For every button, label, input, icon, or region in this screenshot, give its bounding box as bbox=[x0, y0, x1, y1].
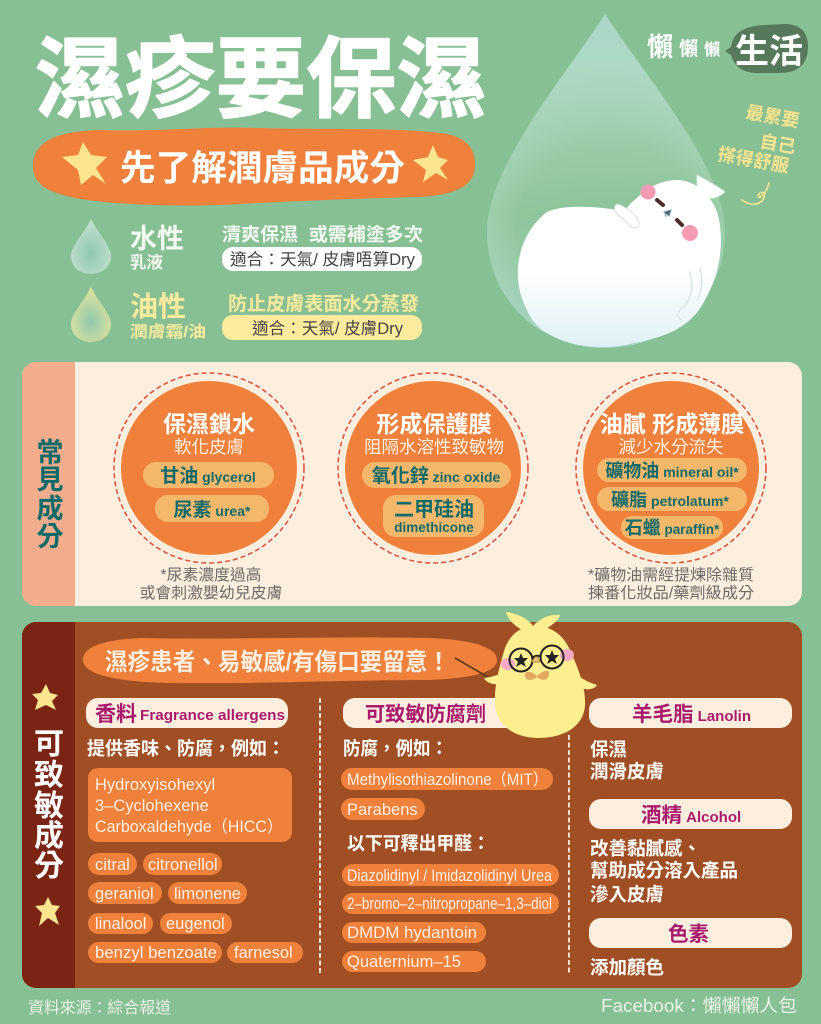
vertical heading bbox=[36, 438, 64, 552]
circle: greasy thin film: 油膩 形成薄膜 bbox=[600, 411, 744, 437]
note: mineral oil: 揀番化妝品/藥劑級成分 bbox=[588, 584, 755, 602]
oil type description: 防止皮膚表面水分蒸發 bbox=[228, 292, 419, 315]
handwritten note bbox=[716, 102, 801, 204]
column: fragrance: benzyl benzoate bbox=[95, 944, 217, 962]
column: lanolin, alcohol, colourant: 改善黏膩感、 bbox=[590, 838, 701, 859]
column dividers bbox=[319, 698, 321, 973]
column: fragrance: 3–Cyclohexene bbox=[95, 797, 209, 815]
water type label bbox=[130, 224, 184, 272]
logo speech bubble bbox=[725, 24, 808, 73]
circle: protective film: 二甲硅油 bbox=[394, 498, 474, 521]
column: preservatives bbox=[341, 698, 559, 972]
pointer stick bbox=[455, 658, 493, 680]
seal tail lines bbox=[678, 268, 702, 320]
note: mineral oil bbox=[588, 565, 755, 602]
vertical heading: 分 bbox=[36, 522, 64, 552]
column: lanolin, alcohol, colourant: 幫助成分溶入產品 bbox=[590, 860, 738, 881]
callout banner bbox=[83, 637, 497, 683]
title: 濕疹要保濕 bbox=[35, 30, 487, 129]
panel: allergenic ingredients bbox=[22, 612, 802, 988]
column: lanolin, alcohol, colourant: 羊毛脂 Lanolin bbox=[632, 703, 751, 726]
glasses bbox=[510, 646, 564, 672]
column: lanolin, alcohol, colourant: 潤滑皮膚 bbox=[590, 761, 664, 782]
water type description: 適合：天氣/ 皮膚唔算Dry bbox=[230, 250, 416, 269]
bow tie bbox=[525, 671, 549, 680]
circle: moisture lock: 軟化皮膚 bbox=[174, 437, 244, 457]
water type label: 水性 bbox=[130, 224, 184, 254]
column: fragrance: citronellol bbox=[148, 856, 218, 874]
column: lanolin, alcohol, colourant: 保濕 bbox=[590, 739, 627, 760]
footer: source: 資料來源：綜合報道 bbox=[28, 999, 171, 1017]
circle: greasy thin film bbox=[576, 373, 766, 563]
cheeks bbox=[501, 658, 515, 670]
vertical heading: 致 bbox=[34, 759, 64, 792]
icon: star top bbox=[32, 684, 58, 710]
illustration: big water drop with seal bbox=[487, 14, 725, 348]
handwritten note: 自己 bbox=[758, 131, 797, 157]
vertical heading: 見 bbox=[36, 465, 64, 495]
body bbox=[495, 626, 585, 738]
oil type description: 適合：天氣/ 皮膚Dry bbox=[252, 319, 404, 338]
vertical heading: 成 bbox=[36, 494, 64, 524]
column: preservatives: Parabens bbox=[347, 801, 418, 819]
vertical heading: 敏 bbox=[34, 790, 64, 823]
handwritten note: 搽得舒服 bbox=[716, 143, 791, 176]
subtitle text: 先了解潤膚品成分 bbox=[120, 148, 405, 188]
vertical heading: 成 bbox=[34, 820, 64, 853]
column: fragrance: Fragrance allergens bbox=[140, 707, 285, 724]
icon: star bottom bbox=[35, 897, 60, 926]
arms bbox=[484, 668, 597, 689]
oil type label: 潤膚霜/油 bbox=[130, 323, 206, 341]
column: preservatives: Quaternium–15 bbox=[347, 953, 461, 971]
note: urea: 或會刺激嬰幼兒皮膚 bbox=[140, 584, 282, 602]
column: fragrance: farnesol bbox=[234, 944, 293, 962]
water type description bbox=[222, 224, 424, 271]
logo bbox=[647, 24, 808, 73]
water type description: 清爽保濕 或需補塗多次 bbox=[222, 224, 424, 245]
star eyes bbox=[514, 653, 528, 667]
column: preservatives: 防腐，例如： bbox=[343, 738, 448, 759]
circle: greasy thin film: 礦物油 mineral oil* bbox=[605, 460, 739, 481]
column: preservatives: 可致敏防腐劑 bbox=[365, 702, 486, 726]
logo: 生活 bbox=[735, 33, 803, 71]
bow bbox=[506, 612, 560, 632]
icon: right star bbox=[413, 145, 448, 182]
seal body bbox=[518, 180, 721, 347]
seal cheeks bbox=[640, 184, 656, 200]
column: fragrance: linalool bbox=[95, 915, 146, 933]
seal arm bbox=[615, 204, 639, 228]
oil type description bbox=[222, 292, 422, 340]
circle: moisture lock: 甘油 glycerol bbox=[160, 465, 256, 487]
column: fragrance: Hydroxyisohexyl bbox=[95, 776, 215, 794]
oil type label: 油性 bbox=[130, 291, 186, 322]
icon: water drop, water type bbox=[71, 219, 111, 274]
circle: protective film: dimethicone bbox=[394, 520, 474, 535]
circle: protective film: 氧化鋅 zinc oxide bbox=[372, 464, 501, 487]
illustration: yellow chick with pointer bbox=[455, 612, 597, 738]
icon: left star bbox=[62, 142, 107, 185]
column: lanolin, alcohol, colourant bbox=[589, 698, 792, 978]
seal hat bbox=[697, 175, 725, 198]
circle: greasy thin film: 礦脂 petrolatum* bbox=[611, 489, 729, 510]
column: lanolin, alcohol, colourant: 滲入皮膚 bbox=[590, 884, 664, 905]
column: fragrance: limonene bbox=[174, 885, 241, 903]
note: urea bbox=[140, 566, 282, 602]
oil type label bbox=[130, 291, 206, 341]
callout banner: 濕疹患者、易敏感/有傷口要留意！ bbox=[105, 648, 450, 676]
column: fragrance: 提供香味、防腐，例如： bbox=[87, 738, 285, 759]
column: preservatives: 2–bromo–2–nitropropane–1,3–diol bbox=[347, 895, 552, 913]
circle: protective film: 形成保護膜 bbox=[376, 411, 492, 437]
circle: moisture lock: 尿素 urea* bbox=[174, 499, 251, 521]
column: fragrance: 香料 bbox=[95, 703, 137, 726]
column: lanolin, alcohol, colourant: 添加顏色 bbox=[590, 957, 664, 978]
column: fragrance: citral bbox=[95, 856, 130, 874]
logo: 懶 bbox=[704, 41, 720, 59]
column: lanolin, alcohol, colourant: 色素 bbox=[668, 923, 709, 946]
vertical heading bbox=[34, 728, 64, 883]
circle: protective film: 阻隔水溶性致敏物 bbox=[364, 437, 504, 457]
column: fragrance: geraniol bbox=[95, 885, 154, 903]
circle: greasy thin film: 石蠟 paraffin* bbox=[625, 518, 720, 538]
circle: protective film bbox=[338, 373, 528, 563]
handwritten note: 最累要 bbox=[744, 102, 801, 131]
logo: 懶 bbox=[647, 32, 673, 62]
column: preservatives: 以下可釋出甲醛： bbox=[347, 833, 490, 854]
seal eyes bbox=[657, 200, 663, 205]
panel: common ingredients bbox=[22, 362, 802, 606]
circle: moisture lock: 保濕鎖水 bbox=[163, 411, 255, 437]
vertical heading: 可 bbox=[34, 728, 64, 761]
seal nose bbox=[664, 210, 671, 217]
column: preservatives: Diazolidinyl / Imidazolidinyl Urea bbox=[347, 867, 553, 885]
logo: 懶 bbox=[679, 38, 698, 60]
footer: facebook: Facebook：懶懶懶人包 bbox=[601, 996, 797, 1016]
water type label: 乳液 bbox=[130, 253, 164, 272]
subtitle banner bbox=[33, 128, 475, 206]
vertical heading: 常 bbox=[36, 438, 64, 468]
column: fragrance: Carboxaldehyde（HICC） bbox=[95, 817, 283, 836]
column: preservatives: Methylisothiazolinone（MIT） bbox=[347, 770, 548, 789]
column: fragrance bbox=[86, 698, 303, 963]
circle: moisture lock bbox=[114, 373, 304, 563]
column: fragrance: eugenol bbox=[166, 915, 225, 933]
icon: oil drop bbox=[71, 287, 111, 342]
vertical heading: 分 bbox=[34, 850, 64, 883]
circle: greasy thin film: 減少水分流失 bbox=[618, 437, 724, 457]
note: mineral oil: *礦物油需經提煉除雜質 bbox=[588, 565, 754, 584]
column: preservatives: DMDM hydantoin bbox=[347, 924, 477, 942]
note: urea: *尿素濃度過高 bbox=[160, 566, 262, 584]
column: lanolin, alcohol, colourant: 酒精 Alcohol bbox=[641, 804, 741, 827]
beak bbox=[531, 656, 541, 662]
